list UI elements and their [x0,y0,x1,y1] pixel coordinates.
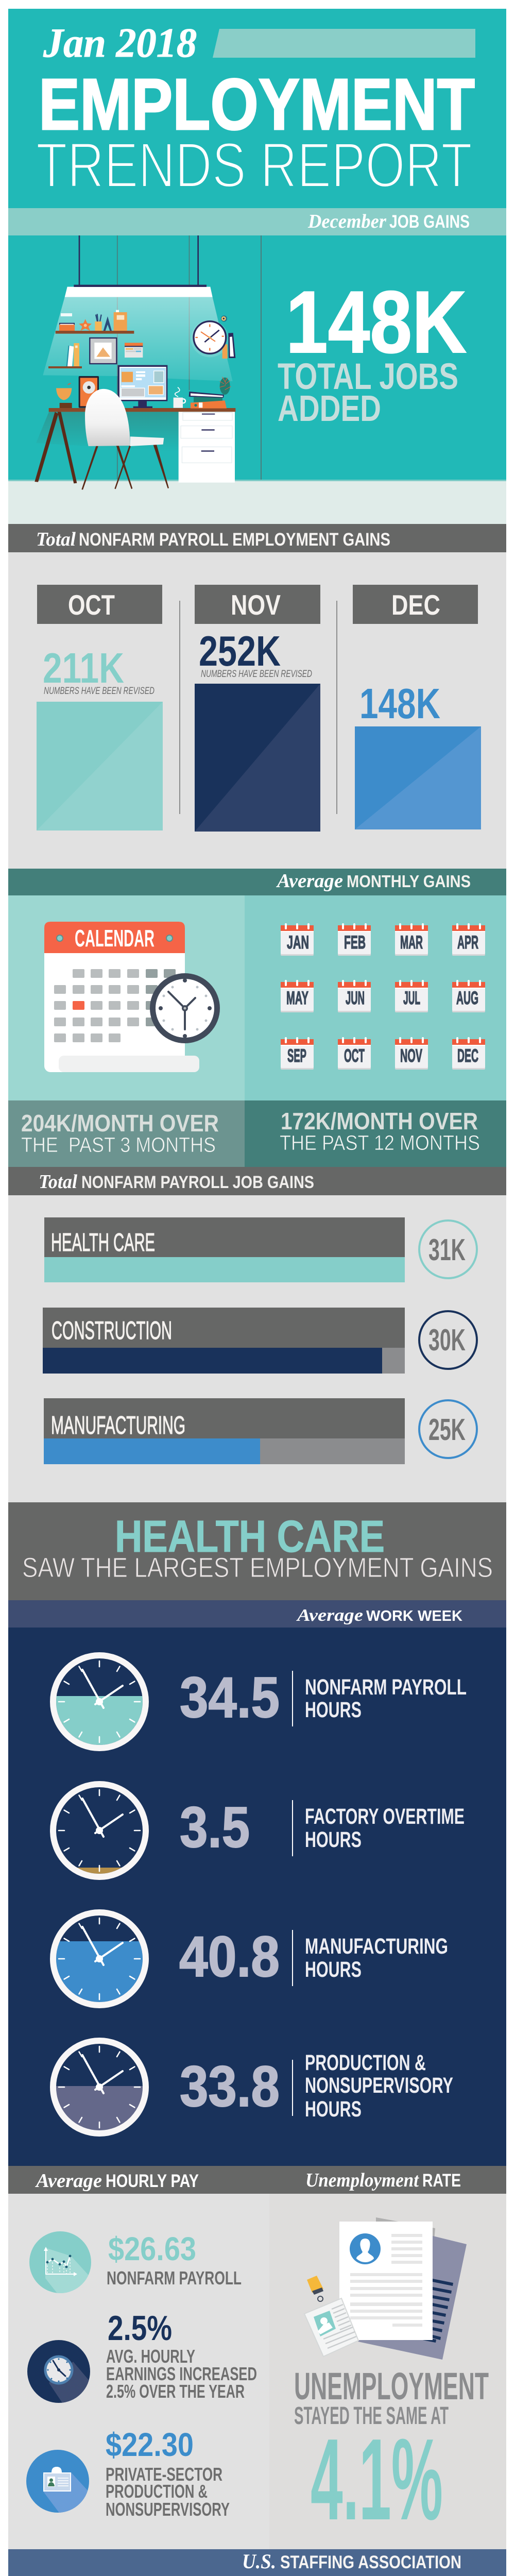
icon grid: twelve month calendars: DEC [457,1046,478,1066]
lamp [65,285,213,297]
icon grid: twelve month calendars: MAY [286,988,308,1008]
row: manufacturing hours: MANUFACTURING [305,1934,448,1959]
icon grid: twelve month calendars: JUL [403,988,420,1008]
stat: private sector pay: NONSUPERVISORY [106,2499,230,2520]
column: oct: NUMBERS HAVE BEEN REVISED [44,686,154,697]
icon: clock gold [53,1784,146,1878]
column: dec: 148K [359,680,440,727]
callout: three month average [8,1100,245,1167]
bar: construction: CONSTRUCTION [52,1317,172,1345]
icon grid: twelve month calendars: JUN [346,988,365,1008]
column: dec: DEC [391,589,440,621]
row: nonfarm payroll hours: HOURS [305,1698,362,1722]
row: nonfarm payroll hours: 34.5 [180,1666,280,1730]
row: nonfarm payroll hours [53,1655,467,1753]
shelves with items [48,310,134,368]
accent bar [213,29,475,58]
stat: nonfarm payroll pay: $26.63 [108,2230,196,2267]
stat: private sector pay: PRIVATE-SECTOR [106,2464,222,2485]
desk bowl [56,383,72,408]
stat: hourly earnings increase: 2.5% OVER THE YEAR [106,2381,245,2402]
illustration: office desk [35,235,235,490]
callout: twelve month average: 172K/MONTH OVER [281,1108,478,1134]
heading: hourly pay and unemployment rate: Average [35,2170,102,2192]
icon: calendar with clock: CALENDAR [75,925,154,952]
under desk shadow [36,412,180,452]
heading: december job gains: JOB GAINS [389,212,470,232]
heading: us staffing association [8,2549,506,2576]
stat: private sector pay [106,2426,230,2520]
total jobs label: ADDED [278,388,381,429]
icon grid: twelve month calendars: JAN [287,933,309,953]
bar: construction: 30K [428,1323,466,1357]
heading: hourly pay and unemployment rate: HOURLY PAY [106,2171,199,2191]
wall clock [191,315,235,359]
heading: total nonfarm payroll job gains [8,1167,506,1195]
stat: nonfarm payroll pay [107,2230,242,2289]
column: oct: OCT [68,589,115,621]
panel: unemployment rate [269,2194,506,2549]
icon: clock [27,2340,93,2406]
stat: hourly earnings increase: AVG. HOURLY [106,2346,195,2367]
bar: manufacturing: 25K [428,1413,466,1447]
heading: december job gains [8,208,506,235]
bar: health care: 31K [428,1233,466,1267]
stat: nonfarm payroll pay: NONFARM PAYROLL [107,2267,242,2289]
heading: us staffing association: U.S. [242,2550,276,2573]
illustration: resume documents [339,2217,467,2360]
panel: average monthly gains [8,895,506,1167]
illustration: lanyard id card [304,2276,358,2357]
callout: three month average: THE PAST 3 MONTHS [21,1133,216,1157]
icon grid: twelve month calendars: SEP [287,1046,306,1066]
light cone [43,297,233,381]
heading: average monthly gains [8,869,506,895]
row: factory overtime hours: 3.5 [180,1795,250,1859]
heading: hourly pay and unemployment rate [8,2166,506,2194]
wall art frame [90,338,116,364]
total jobs label [278,357,458,429]
row: production and nonsupervisory hours [53,2041,453,2138]
monitor [118,365,167,409]
panel: monthly bar chart [8,552,506,869]
desk drawers [179,412,235,483]
heading: hourly pay and unemployment rate: Unemployment [305,2170,419,2191]
bar: manufacturing: MANUFACTURING [51,1412,185,1439]
heading: december job gains: December [307,211,387,232]
icon: line chart [29,2231,93,2298]
column: dec [353,585,481,829]
chair [81,389,169,490]
big number: 148K [286,273,467,371]
icon: clock blue [53,1912,146,2008]
row: manufacturing hours [53,1912,448,2008]
row: production and nonsupervisory hours: 33.8 [180,2055,280,2119]
heading: total nonfarm payroll employment gains: Total [36,529,76,550]
icon: clock teal [53,1655,146,1753]
row: manufacturing hours: 40.8 [179,1925,280,1989]
stat: hourly earnings increase: EARNINGS INCREASED [106,2363,257,2384]
row: production and nonsupervisory hours: NONSUPERVISORY [305,2073,453,2098]
column: nov: NOV [231,589,281,621]
speaker [79,376,99,408]
column: nov: NUMBERS HAVE BEEN REVISED [201,669,312,680]
icon grid: twelve month calendars: MAR [400,933,423,953]
heading: us staffing association: STAFFING ASSOCIATION [280,2552,461,2572]
stat: private sector pay: PRODUCTION & [106,2481,208,2502]
row: factory overtime hours: HOURS [305,1827,362,1852]
date script: Jan 2018 [43,21,197,66]
icon: clock slate [53,2041,146,2138]
text: unemployment statement [294,2365,489,2430]
icon grid: twelve month calendars: FEB [344,933,366,953]
icon grid: twelve month calendars: OCT [344,1046,365,1066]
bar: health care: HEALTH CARE [51,1229,155,1257]
icon grid: twelve month calendars: NOV [400,1046,422,1066]
heading: average work week: WORK WEEK [366,1608,462,1624]
icon grid: twelve month calendars: AUG [456,988,478,1008]
heading: total nonfarm payroll job gains: NONFARM PAYROLL JOB GAINS [81,1173,314,1192]
panel: title header [8,9,506,209]
icon grid: twelve month calendars [281,923,485,1070]
heading: hourly pay and unemployment rate: RATE [422,2171,461,2191]
total jobs label: TOTAL JOBS [278,357,458,397]
row: manufacturing hours: HOURS [305,1957,362,1982]
stat: private sector pay: $22.30 [106,2426,194,2463]
coffee mug [174,387,185,408]
row: production and nonsupervisory hours: PRODUCTION & [305,2050,426,2075]
desk [35,408,235,483]
panel: sector job gains [8,1195,506,1502]
panel: december job gains [8,235,506,524]
row: factory overtime hours [53,1784,465,1878]
callout: three month average: 204K/MONTH OVER [21,1110,219,1137]
callout: twelve month average: THE PAST 12 MONTHS [280,1131,480,1155]
panel: health care callout [8,1502,506,1600]
column: nov [195,585,320,832]
heading: average monthly gains: MONTHLY GAINS [347,872,471,891]
panel: average work week [8,1628,506,2166]
callout: twelve month average [245,1100,506,1167]
heading: average work week [8,1600,506,1628]
bar: health care [44,1217,477,1282]
heading: average work week: Average [296,1606,363,1625]
icon: id badge [26,2450,93,2514]
icon: calendar with clock [44,922,217,1072]
column: nov: 252K [199,627,281,675]
heading: total nonfarm payroll job gains: Total [39,1171,77,1193]
stat: hourly earnings increase [106,2309,257,2402]
bar: manufacturing [44,1398,477,1464]
bar: construction [43,1308,477,1374]
stat: hourly earnings increase: 2.5% [108,2309,172,2348]
heading: average monthly gains: Average [276,870,343,892]
row: production and nonsupervisory hours: HOURS [305,2097,362,2122]
column: oct [37,585,163,831]
wall calendar [125,343,143,358]
panel: average hourly pay [8,2194,269,2549]
books and plant [189,377,231,409]
column: oct: 211K [43,644,124,692]
heading: total nonfarm payroll employment gains: NONFARM PAYROLL EMPLOYMENT GAINS [79,530,390,550]
heading: total nonfarm payroll employment gains [8,524,506,552]
callout heading: HEALTH CARE [115,1512,385,1562]
icon grid: twelve month calendars: APR [457,933,478,953]
